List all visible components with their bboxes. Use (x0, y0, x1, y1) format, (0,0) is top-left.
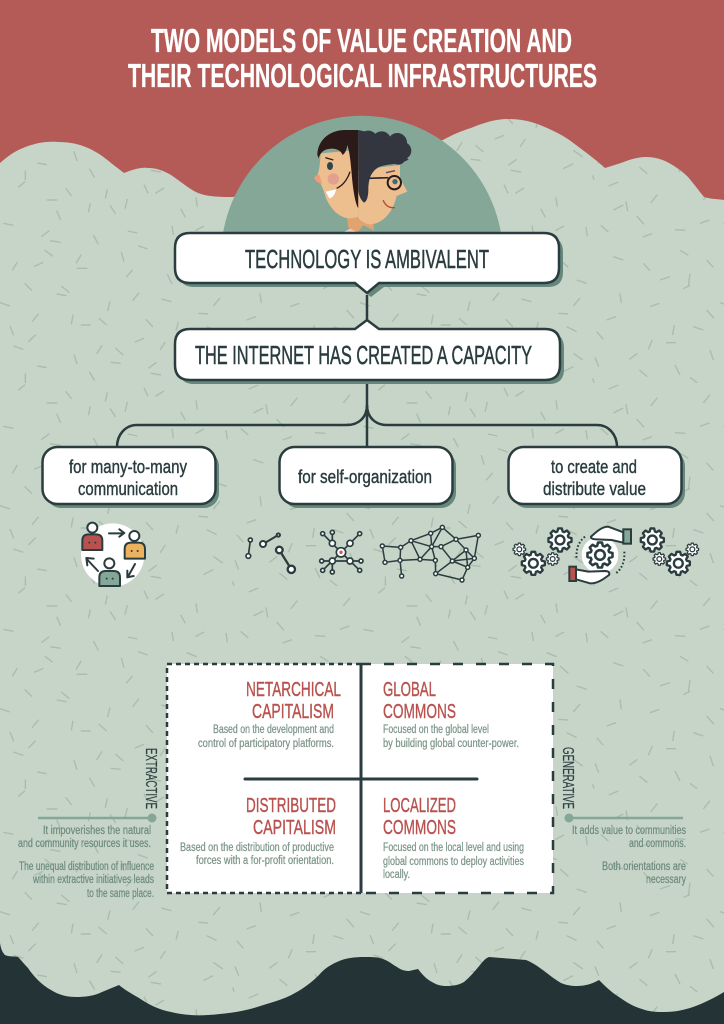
axis label: extractive: EXTRACTIVE (142, 748, 159, 809)
box: technology is ambivalent (175, 233, 563, 297)
quadrant: distributed capitalism: DISTRIBUTED (246, 794, 336, 817)
quadrant: localized commons (383, 794, 524, 881)
box: for many-to-many communication: for many-to-many (69, 457, 187, 477)
box: for self-organization (280, 447, 456, 508)
connector lines (117, 295, 617, 448)
quadrant: netarchical capitalism: NETARCHICAL (246, 678, 341, 701)
box: technology is ambivalent: TECHNOLOGY IS AMBIVALENT (245, 244, 489, 274)
text block: extractive notes: to the same place. (87, 888, 154, 900)
quadrant: localized commons: LOCALIZED (383, 794, 456, 817)
text block: generative notes: Both orientations are (602, 861, 686, 873)
icon: growing network nodes (246, 533, 295, 573)
text block: extractive notes: The unequal distribution of influence (19, 861, 154, 873)
box: for many-to-many communication (42, 447, 219, 508)
quadrant: distributed capitalism (180, 794, 336, 867)
text block: generative notes: It adds value to communities (572, 825, 686, 837)
box: for self-organization: for self-organization (298, 467, 432, 487)
quadrant: localized commons: Focused on the local level and using (383, 842, 524, 854)
title (128, 23, 597, 95)
box: the internet has created a capacity: THE INTERNET HAS CREATED A CAPACITY (195, 340, 532, 370)
quadrant: global commons: COMMONS (383, 700, 456, 723)
box: for many-to-many communication: communication (78, 479, 178, 499)
icon: two faces in profile (314, 130, 411, 233)
leader line: extractive (38, 814, 156, 822)
quadrant: distributed capitalism: forces with a for-profit orientation. (196, 855, 334, 867)
text block: generative notes (572, 825, 686, 886)
icon: hub-and-spoke network (320, 530, 363, 574)
quadrant: localized commons: locally. (383, 869, 410, 881)
box: to create and distribute value: distribute value (543, 479, 646, 499)
leader line: generative (564, 814, 683, 822)
text block: generative notes: necessary (646, 874, 686, 886)
quadrant: global commons: GLOBAL (383, 678, 436, 701)
box: to create and distribute value: to create and (551, 457, 637, 477)
teal semicircle behind faces (222, 116, 502, 240)
quadrant: global commons: Focused on the global level (383, 724, 489, 736)
box: to create and distribute value (508, 447, 685, 508)
quadrant: distributed capitalism: CAPITALISM (253, 816, 336, 839)
box: the internet has created a capacity (175, 320, 564, 384)
icon: gears and hands creating value (513, 527, 699, 583)
text block: extractive notes (18, 825, 154, 900)
panel: quadrant matrix (167, 664, 553, 893)
text block: extractive notes: It impoverishes the natural (43, 825, 151, 837)
background: dark wavy footer (0, 943, 724, 1024)
quadrant: netarchical capitalism (198, 678, 341, 750)
text block: extractive notes: and community resources it uses. (18, 838, 151, 850)
quadrant: localized commons: global commons to deploy activities (383, 856, 524, 868)
text block: extractive notes: within extractive initiatives leads (32, 874, 154, 886)
quadrant: netarchical capitalism: control of participatory platforms. (198, 738, 334, 750)
quadrant: global commons: by building global counter-power. (383, 738, 519, 750)
quadrant: distributed capitalism: Based on the distribution of productive (180, 842, 334, 854)
icon: people communicating in a circle (81, 523, 145, 587)
icon: mesh network map (380, 525, 480, 582)
quadrant: localized commons: COMMONS (383, 816, 456, 839)
text block: generative notes: and commons. (629, 838, 686, 850)
axis label: generative: GENERATIVE (559, 747, 576, 809)
quadrant: global commons (383, 678, 519, 750)
quadrant: netarchical capitalism: CAPITALISM (252, 700, 334, 723)
quadrant: netarchical capitalism: Based on the development and (213, 724, 334, 736)
